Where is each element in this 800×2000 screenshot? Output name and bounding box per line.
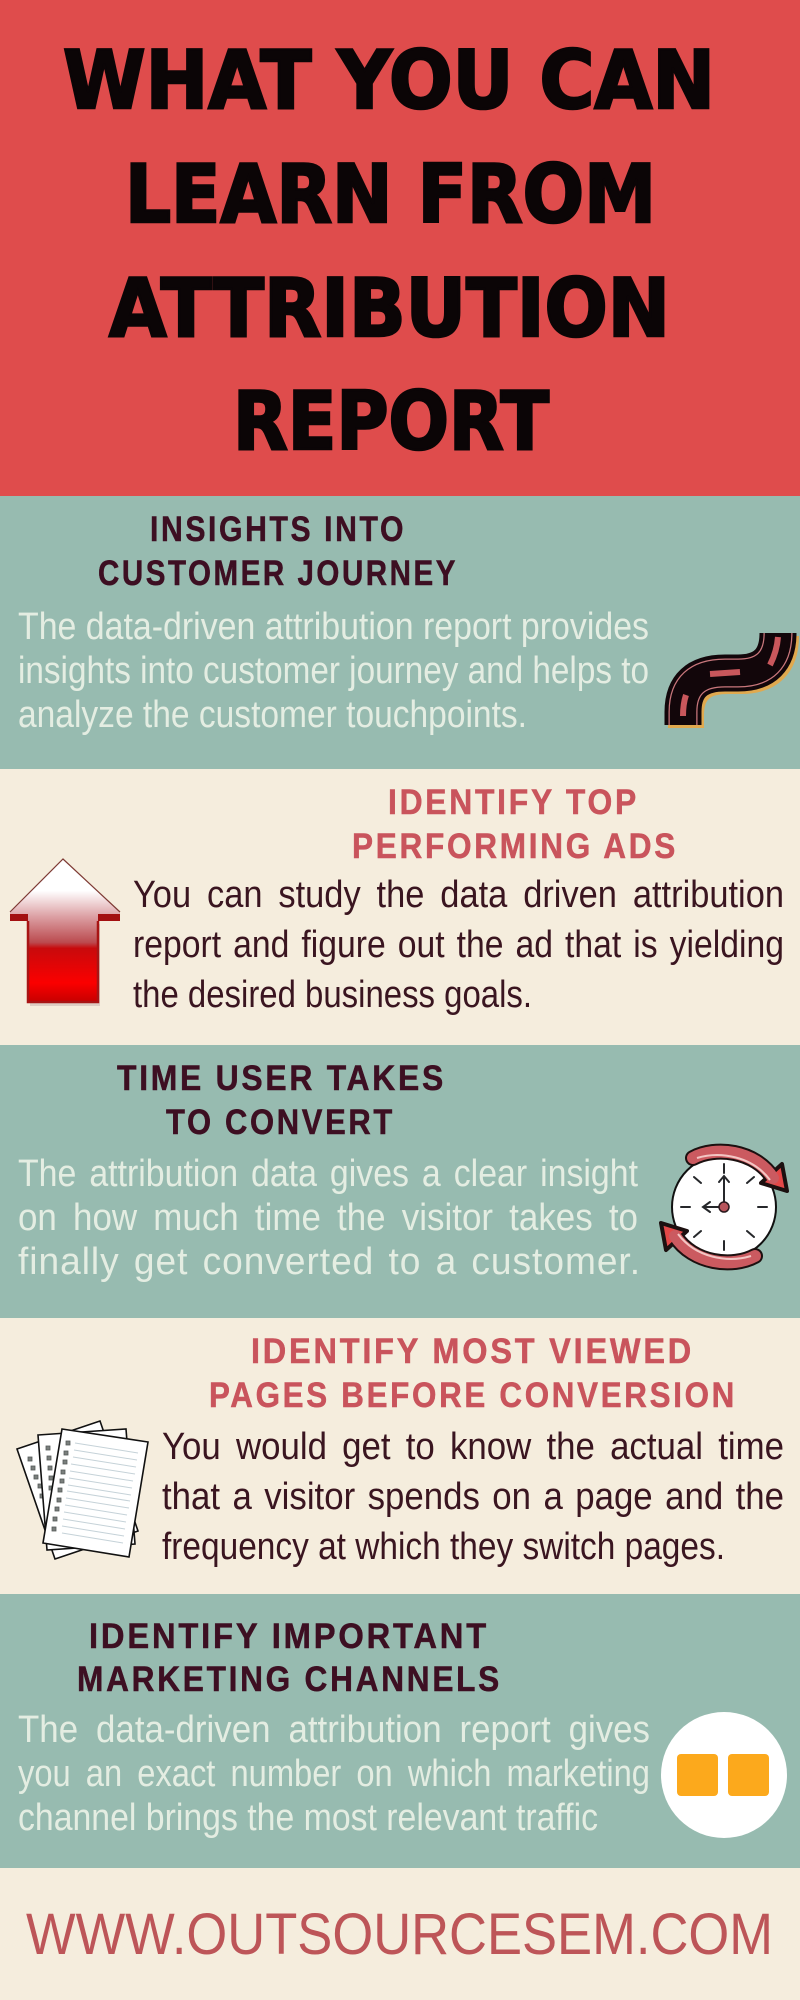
text block: marketing channels description: channel brings the most relevant traffic bbox=[18, 1797, 598, 1839]
panel: title banner bbox=[0, 0, 800, 496]
text block: marketing channels description: The data-driven attribution report gives bbox=[18, 1709, 650, 1751]
text block: customer journey description: insights into customer journey and helps to bbox=[18, 650, 649, 692]
icon: top rotation arrow bbox=[693, 1152, 787, 1191]
title: LEARN FROM bbox=[125, 148, 656, 241]
heading: identify top performing ads bbox=[352, 783, 678, 866]
text block: marketing channels description bbox=[18, 1709, 650, 1839]
panel: identify most viewed pages before conversion bbox=[0, 1318, 800, 1594]
title bbox=[63, 34, 715, 468]
icon: bottom rotation arrow bbox=[661, 1223, 755, 1262]
text block: customer journey description: The data-driven attribution report provides bbox=[18, 606, 649, 648]
text block: customer journey description bbox=[18, 606, 649, 736]
panel: identify top performing ads bbox=[0, 769, 800, 1045]
heading: insights into customer journey: CUSTOMER JOURNEY bbox=[98, 554, 458, 593]
title: WHAT YOU CAN bbox=[63, 34, 715, 127]
text block: top performing ads description bbox=[133, 874, 784, 1016]
title: REPORT bbox=[233, 375, 549, 468]
heading: identify most viewed pages before conversion bbox=[209, 1332, 737, 1415]
text block: most viewed pages description bbox=[162, 1426, 784, 1568]
heading: identify important marketing channels: IDENTIFY IMPORTANT bbox=[89, 1617, 489, 1656]
text block: top performing ads description: the desired business goals. bbox=[133, 974, 532, 1016]
icon: red up arrow bbox=[10, 859, 120, 1006]
panel: time user takes to convert bbox=[0, 1045, 800, 1318]
panel: identify important marketing channels bbox=[0, 1594, 800, 1868]
heading: identify important marketing channels: MARKETING CHANNELS bbox=[77, 1660, 502, 1699]
icon: winding road bbox=[683, 633, 781, 728]
heading: time user takes to convert bbox=[117, 1059, 446, 1142]
text block: most viewed pages description: frequency at which they switch pages. bbox=[162, 1526, 725, 1568]
heading: insights into customer journey: INSIGHTS INTO bbox=[150, 510, 406, 549]
heading: identify most viewed pages before conversion: PAGES BEFORE CONVERSION bbox=[209, 1376, 737, 1415]
heading: time user takes to convert: TIME USER TAKES bbox=[117, 1059, 446, 1098]
text block: marketing channels description: you an exact number on which marketing bbox=[18, 1753, 650, 1795]
text block: time to convert description: The attribution data gives a clear insight bbox=[18, 1153, 638, 1195]
panel: insights into customer journey bbox=[0, 496, 800, 769]
heading: identify important marketing channels bbox=[77, 1617, 502, 1699]
icon: white circle with two orange squares bbox=[661, 1712, 787, 1838]
icon: stack of notebook pages bbox=[17, 1421, 148, 1559]
heading: identify top performing ads: PERFORMING ADS bbox=[352, 827, 678, 866]
panel: website footer bbox=[0, 1868, 800, 2000]
title: ATTRIBUTION bbox=[109, 262, 670, 355]
icon: clock with circular arrows bbox=[661, 1152, 787, 1262]
heading: time user takes to convert: TO CONVERT bbox=[166, 1103, 395, 1142]
text block: customer journey description: analyze the customer touchpoints. bbox=[18, 694, 527, 736]
heading: insights into customer journey bbox=[98, 510, 458, 593]
heading: identify most viewed pages before conversion: IDENTIFY MOST VIEWED bbox=[251, 1332, 694, 1371]
heading: identify top performing ads: IDENTIFY TOP bbox=[388, 783, 639, 822]
text block: time to convert description: finally get converted to a customer. bbox=[18, 1241, 641, 1283]
text block: time to convert description bbox=[18, 1153, 641, 1283]
text block: time to convert description: on how much time the visitor takes to bbox=[18, 1197, 638, 1239]
